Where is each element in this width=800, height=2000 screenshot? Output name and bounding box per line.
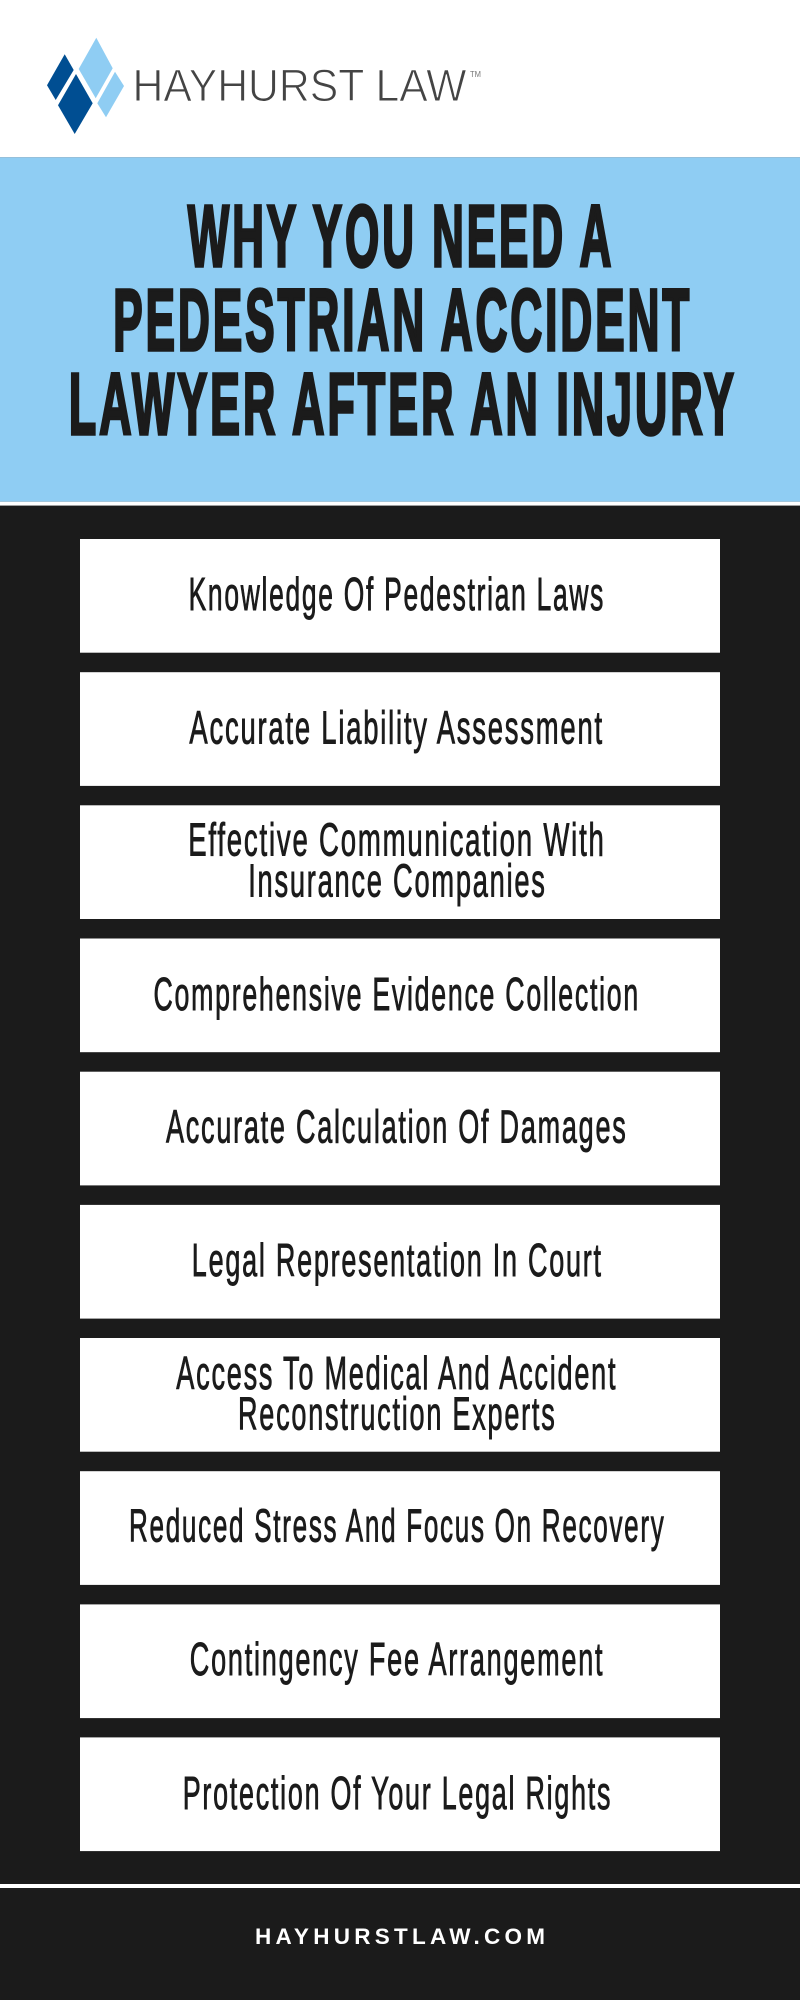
list item: Accurate Calculation Of Damages [80,1072,720,1185]
list item: Comprehensive Evidence Collection [80,938,720,1052]
list item: Legal Representation In Court [80,1205,720,1319]
list item: Protection Of Your Legal Rights [80,1737,720,1851]
title [69,188,737,453]
list item: Contingency Fee Arrangement [80,1604,720,1718]
footer website address: HAYHURSTLAW.COM [255,1924,545,1949]
trademark mark: TM [470,70,481,79]
list item: Accurate Liability Assessment [80,672,720,786]
panel: list of reasons [0,506,800,1884]
divider: top white line [0,502,800,506]
list item: Effective Communication With Insurance Companies: Insurance Companies [248,855,547,907]
icon: diamond logo mark [47,38,124,134]
header logo [47,38,481,134]
title banner [0,157,800,502]
list item: Access To Medical And Accident Reconstruction Experts: Reconstruction Experts [238,1388,556,1440]
divider: bottom white line [0,1884,800,1888]
list item: Reduced Stress And Focus On Recovery [80,1471,720,1585]
list item: Access To Medical And Accident Reconstruction Experts [80,1338,720,1452]
list item: Knowledge Of Pedestrian Laws [80,539,720,653]
logo wordmark: HAYHURST LAW [132,60,467,111]
list item: Effective Communication With Insurance Companies [80,805,720,919]
